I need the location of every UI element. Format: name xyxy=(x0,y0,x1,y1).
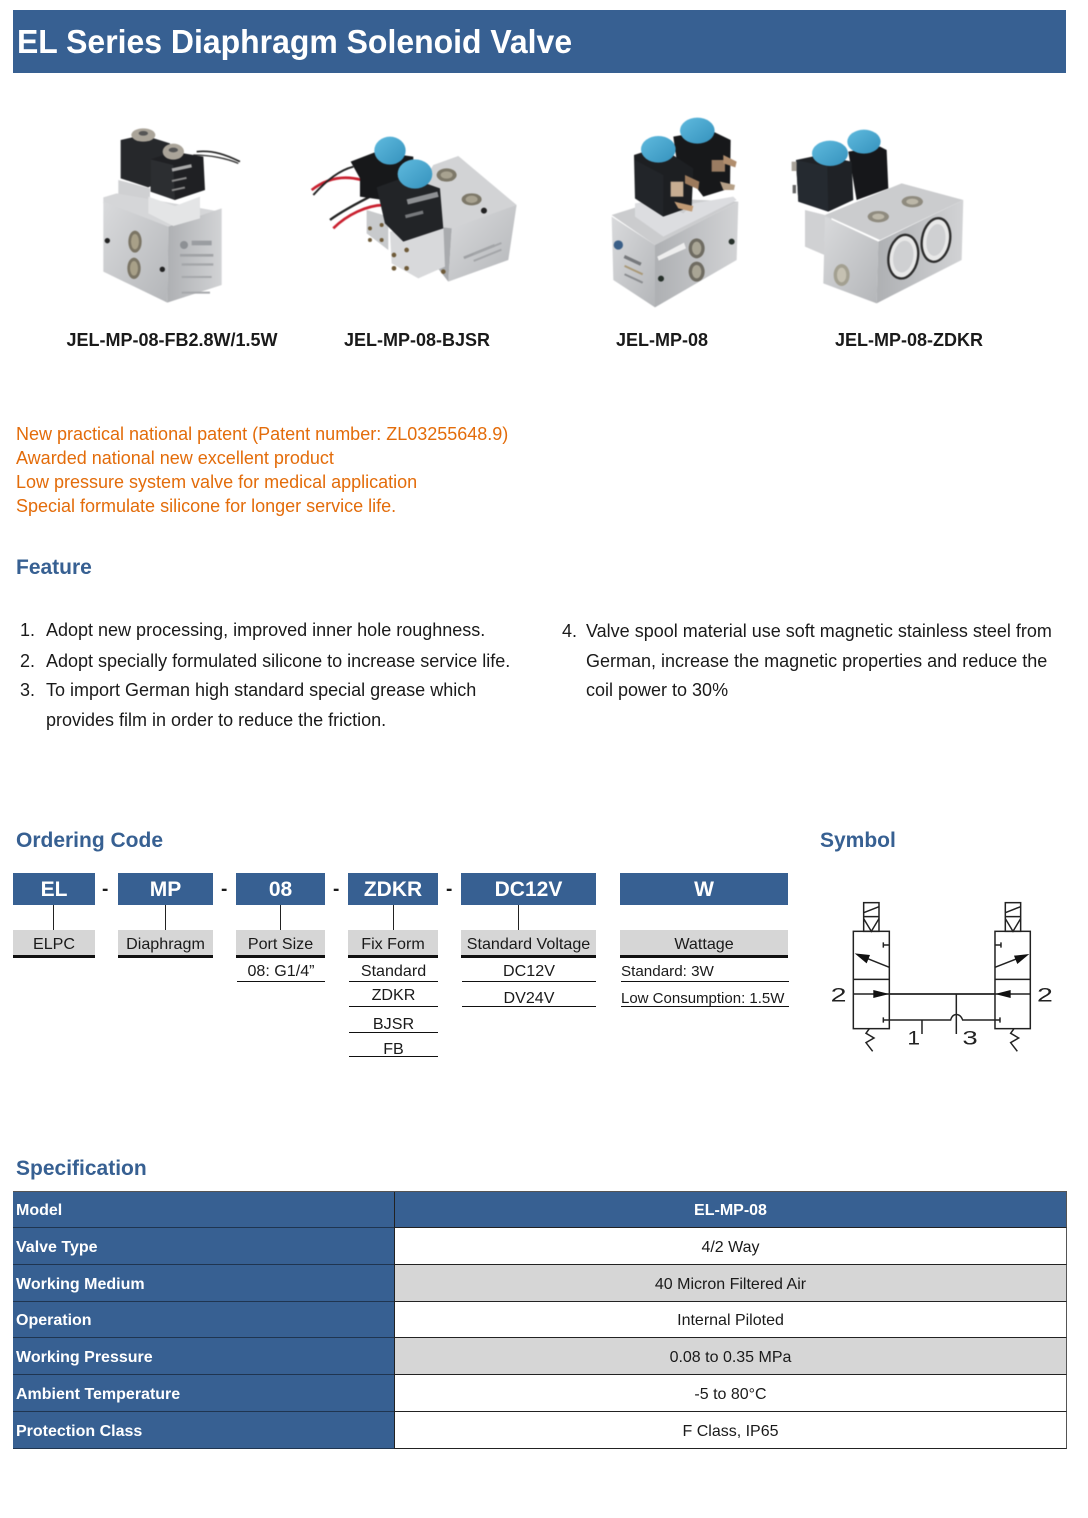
product photos xyxy=(103,116,964,308)
row: Ambient Temperature xyxy=(13,1375,1067,1412)
row: Working Pressure xyxy=(13,1338,1067,1375)
feature list left xyxy=(20,620,510,730)
row: Ambient Temperature: -5 to 80°C xyxy=(694,1386,767,1403)
model name: BJSR: JEL-MP-08-BJSR xyxy=(344,330,490,350)
row: Valve Type: 4/2 Way xyxy=(701,1239,760,1256)
value: DC12V: DC12V xyxy=(503,962,555,980)
value: DV24V xyxy=(462,988,596,1007)
row: Model xyxy=(13,1192,1067,1228)
row: Model: Model xyxy=(16,1202,62,1219)
field: Standard Voltage: Standard Voltage xyxy=(467,935,590,953)
code: W: W xyxy=(694,878,714,901)
value: Standard 3W: Standard: 3W xyxy=(621,963,714,980)
value: 08 G1/4 xyxy=(237,961,325,982)
feature list left: To import German high standard special grease which xyxy=(46,680,476,700)
feature list left: 1. xyxy=(20,620,35,640)
feature list right: Valve spool material use soft magnetic stainless steel from xyxy=(586,621,1052,641)
feature list right xyxy=(562,621,1052,700)
field: ELPC xyxy=(13,930,95,958)
field: ELPC: ELPC xyxy=(33,935,75,953)
heading: Specification: Specification xyxy=(16,1157,147,1180)
code: MP xyxy=(118,873,213,905)
feature list right: German, increase the magnetic properties and reduce the xyxy=(586,651,1047,671)
value: ZDKR: ZDKR xyxy=(372,986,415,1004)
value: BJSR xyxy=(349,1014,438,1033)
row: Operation: Internal Piloted xyxy=(677,1312,784,1329)
field: Standard Voltage xyxy=(461,930,596,958)
field: Diaphragm xyxy=(118,930,213,958)
value: DC12V xyxy=(462,961,596,982)
value: Standard: Standard xyxy=(361,962,426,980)
row: Protection Class: F Class, IP65 xyxy=(682,1423,779,1440)
code: ZDKR: ZDKR xyxy=(364,878,422,901)
row: Working Medium: 40 Micron Filtered Air xyxy=(655,1276,806,1293)
value: Standard xyxy=(349,961,438,982)
code: EL: EL xyxy=(41,878,67,901)
row: Operation xyxy=(13,1302,1067,1338)
heading: Symbol: Symbol xyxy=(820,829,896,852)
code: EL xyxy=(13,873,95,905)
feature list left: Adopt specially formulated silicone to increase service life. xyxy=(46,651,510,671)
code: MP: MP xyxy=(150,878,181,901)
value: FB: FB xyxy=(383,1040,404,1058)
highlights text block: Special formulate silicone for longer service life. xyxy=(16,496,396,516)
code: W xyxy=(620,873,788,905)
value: ZDKR xyxy=(349,985,438,1007)
feature list left: provides film in order to reduce the friction. xyxy=(46,710,386,730)
row: Operation: Operation xyxy=(16,1312,92,1329)
code: DC12V: DC12V xyxy=(495,878,562,901)
field: Port Size: Port Size xyxy=(248,935,313,953)
field: Port Size xyxy=(236,930,325,958)
value: BJSR: BJSR xyxy=(373,1015,414,1033)
feature list right: 4. xyxy=(562,621,577,641)
row: Protection Class xyxy=(13,1412,1067,1449)
field: Wattage: Wattage xyxy=(674,935,734,953)
highlights text block: New practical national patent (Patent number: ZL03255648.9) xyxy=(16,424,508,444)
row: Working Pressure: Working Pressure xyxy=(16,1349,153,1366)
value: FB xyxy=(349,1039,438,1057)
field: Wattage xyxy=(620,930,788,958)
feature list right: coil power to 30% xyxy=(586,680,728,700)
row: Model: EL-MP-08 xyxy=(694,1202,767,1219)
title banner xyxy=(13,10,1066,73)
row: Working Medium xyxy=(13,1265,1067,1302)
pneumatic symbol: 2 xyxy=(831,985,847,1006)
code: DC12V xyxy=(461,873,596,905)
code: 08 xyxy=(236,873,325,905)
field: Fix Form xyxy=(348,930,438,958)
row: Working Medium: Working Medium xyxy=(16,1276,145,1293)
code: 08: 08 xyxy=(269,878,292,901)
model name: standard: JEL-MP-08 xyxy=(616,330,708,350)
heading: Ordering Code: Ordering Code xyxy=(16,829,163,852)
highlights text block: Awarded national new excellent product xyxy=(16,448,334,468)
value: 08 G1/4: 08: G1/4” xyxy=(247,962,315,980)
feature list left: Adopt new processing, improved inner hole roughness. xyxy=(46,620,485,640)
value: Low Consumption: Low Consumption: 1.5W xyxy=(621,990,784,1007)
field: Diaphragm: Diaphragm xyxy=(126,935,205,953)
row: Working Pressure: 0.08 to 0.35 MPa xyxy=(670,1349,791,1366)
row: Ambient Temperature: Ambient Temperature xyxy=(16,1386,180,1403)
ordering code diagram: - xyxy=(333,879,339,900)
highlights text block xyxy=(16,424,508,516)
row: Valve Type: Valve Type xyxy=(16,1239,98,1256)
ordering code diagram xyxy=(13,873,789,1058)
model name: ZDKR: JEL-MP-08-ZDKR xyxy=(835,330,983,350)
value: Standard 3W xyxy=(621,961,789,982)
pneumatic symbol: 2 xyxy=(1037,985,1053,1006)
ordering code diagram: - xyxy=(446,879,452,900)
value: DV24V: DV24V xyxy=(504,989,554,1007)
pneumatic symbol: 3 xyxy=(962,1028,978,1049)
row: Protection Class: Protection Class xyxy=(16,1423,142,1440)
code: ZDKR xyxy=(348,873,438,905)
model name: FB: JEL-MP-08-FB2.8W/1.5W xyxy=(66,330,278,350)
highlights text block: Low pressure system valve for medical application xyxy=(16,472,417,492)
ordering code diagram: - xyxy=(221,879,227,900)
ordering code diagram: - xyxy=(102,879,108,900)
feature list left: 2. xyxy=(20,651,35,671)
heading: Feature: Feature xyxy=(16,556,92,579)
field: Fix Form: Fix Form xyxy=(361,935,425,953)
specification table xyxy=(13,1191,1067,1449)
feature list left: 3. xyxy=(20,680,35,700)
title banner: EL Series Diaphragm Solenoid Valve xyxy=(17,23,572,60)
row: Valve Type xyxy=(13,1228,1067,1265)
pneumatic symbol: 1 xyxy=(907,1028,920,1049)
